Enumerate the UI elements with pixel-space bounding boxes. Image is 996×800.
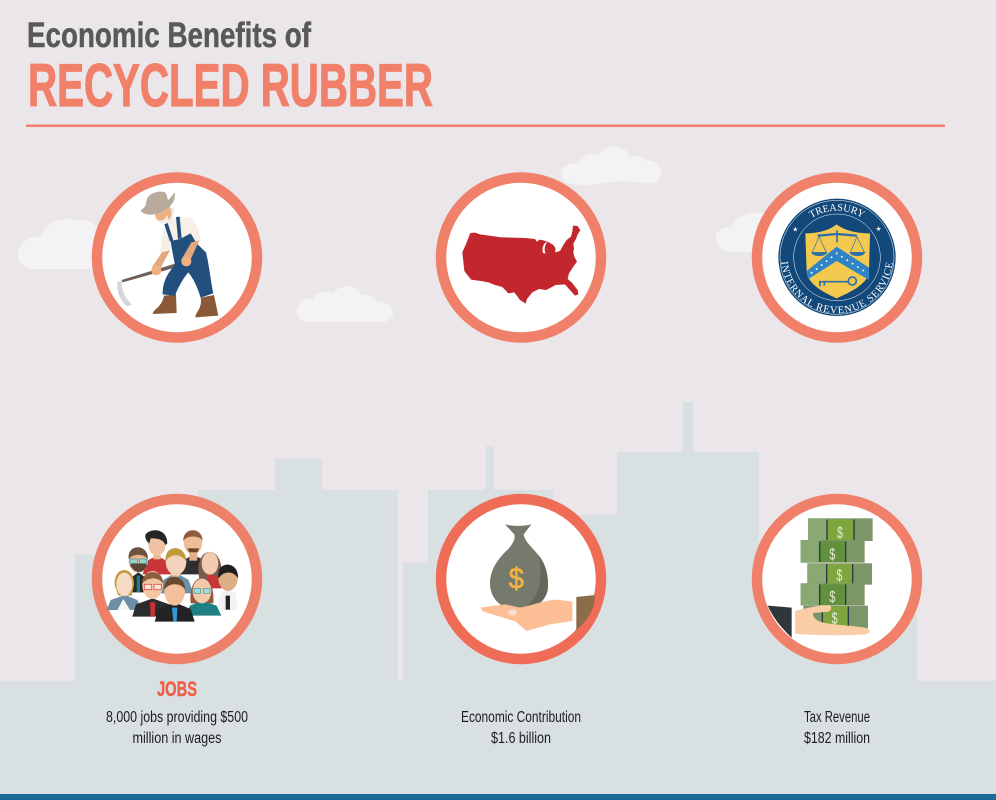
scales	[812, 230, 865, 256]
dollar signs: $	[836, 568, 843, 585]
panel: IRS seal icon	[752, 172, 922, 343]
shirt	[160, 217, 200, 254]
suit sleeve	[576, 595, 595, 630]
seal lettering	[781, 204, 893, 314]
seal lettering: ★	[792, 226, 798, 234]
tax line 1: Tax Revenue	[804, 709, 870, 726]
person blond centre	[160, 548, 193, 593]
person right dark	[217, 565, 238, 610]
seal disc	[778, 199, 896, 316]
jobs text line 2: million in wages	[132, 730, 222, 747]
overalls	[163, 233, 213, 298]
panel: cash stack icon	[757, 499, 917, 659]
footer bar	[0, 794, 996, 800]
dollar signs: $	[832, 610, 838, 627]
seal lettering: INTERNAL REVENUE SERVICE	[781, 261, 893, 314]
seal lettering: TREASURY	[808, 204, 866, 218]
shield	[805, 224, 870, 298]
dollar signs: $	[837, 525, 843, 542]
person back row left	[143, 530, 171, 574]
suit sleeve	[768, 606, 792, 638]
boots	[153, 294, 177, 314]
stack of banknotes	[801, 518, 873, 628]
person woman right	[198, 552, 222, 588]
clouds	[18, 147, 765, 322]
caption: tax revenue	[804, 709, 870, 747]
cloud: left	[18, 219, 100, 269]
jobs text line 1: 8,000 jobs providing $500	[106, 709, 248, 726]
person glasses beard	[127, 547, 150, 592]
panel: money bag icon	[441, 499, 601, 659]
panel: USA map icon	[441, 178, 601, 338]
person back row right	[179, 530, 208, 574]
cloud: centre top	[561, 147, 661, 185]
cloud: right	[716, 213, 765, 252]
hat	[141, 192, 175, 215]
key	[819, 277, 856, 286]
person red glasses	[132, 571, 173, 617]
money bag	[490, 524, 548, 610]
dollar signs: $	[829, 589, 836, 606]
title rule	[26, 124, 945, 127]
chevron	[807, 247, 869, 280]
person front centre	[155, 576, 195, 622]
hand holding cash	[795, 605, 870, 635]
open hand	[480, 600, 572, 631]
panel: farmer icon	[97, 178, 257, 338]
title line 2: RECYCLED RUBBER	[28, 52, 433, 119]
hoe	[117, 257, 197, 306]
contribution line 2: $1.6 billion	[491, 730, 551, 747]
person woman teal	[186, 578, 221, 616]
caption: jobs	[106, 678, 248, 747]
seal lettering: ★	[876, 225, 882, 233]
title	[27, 16, 433, 119]
tax line 2: $182 million	[804, 730, 870, 747]
map of the United States	[462, 226, 580, 304]
dollar signs	[829, 525, 843, 627]
title line 1: Economic Benefits of	[27, 16, 311, 55]
person woman left	[107, 570, 142, 610]
caption: economic contribution	[461, 709, 581, 747]
dollar sign: $	[509, 563, 524, 596]
panel: people icon	[97, 499, 257, 659]
dollar signs: $	[829, 546, 836, 563]
contribution line 1: Economic Contribution	[461, 709, 581, 726]
face	[167, 207, 174, 219]
jobs heading: JOBS	[157, 678, 197, 701]
city skyline background	[0, 402, 996, 795]
cloud: centre low	[297, 286, 393, 322]
arms	[152, 250, 170, 269]
